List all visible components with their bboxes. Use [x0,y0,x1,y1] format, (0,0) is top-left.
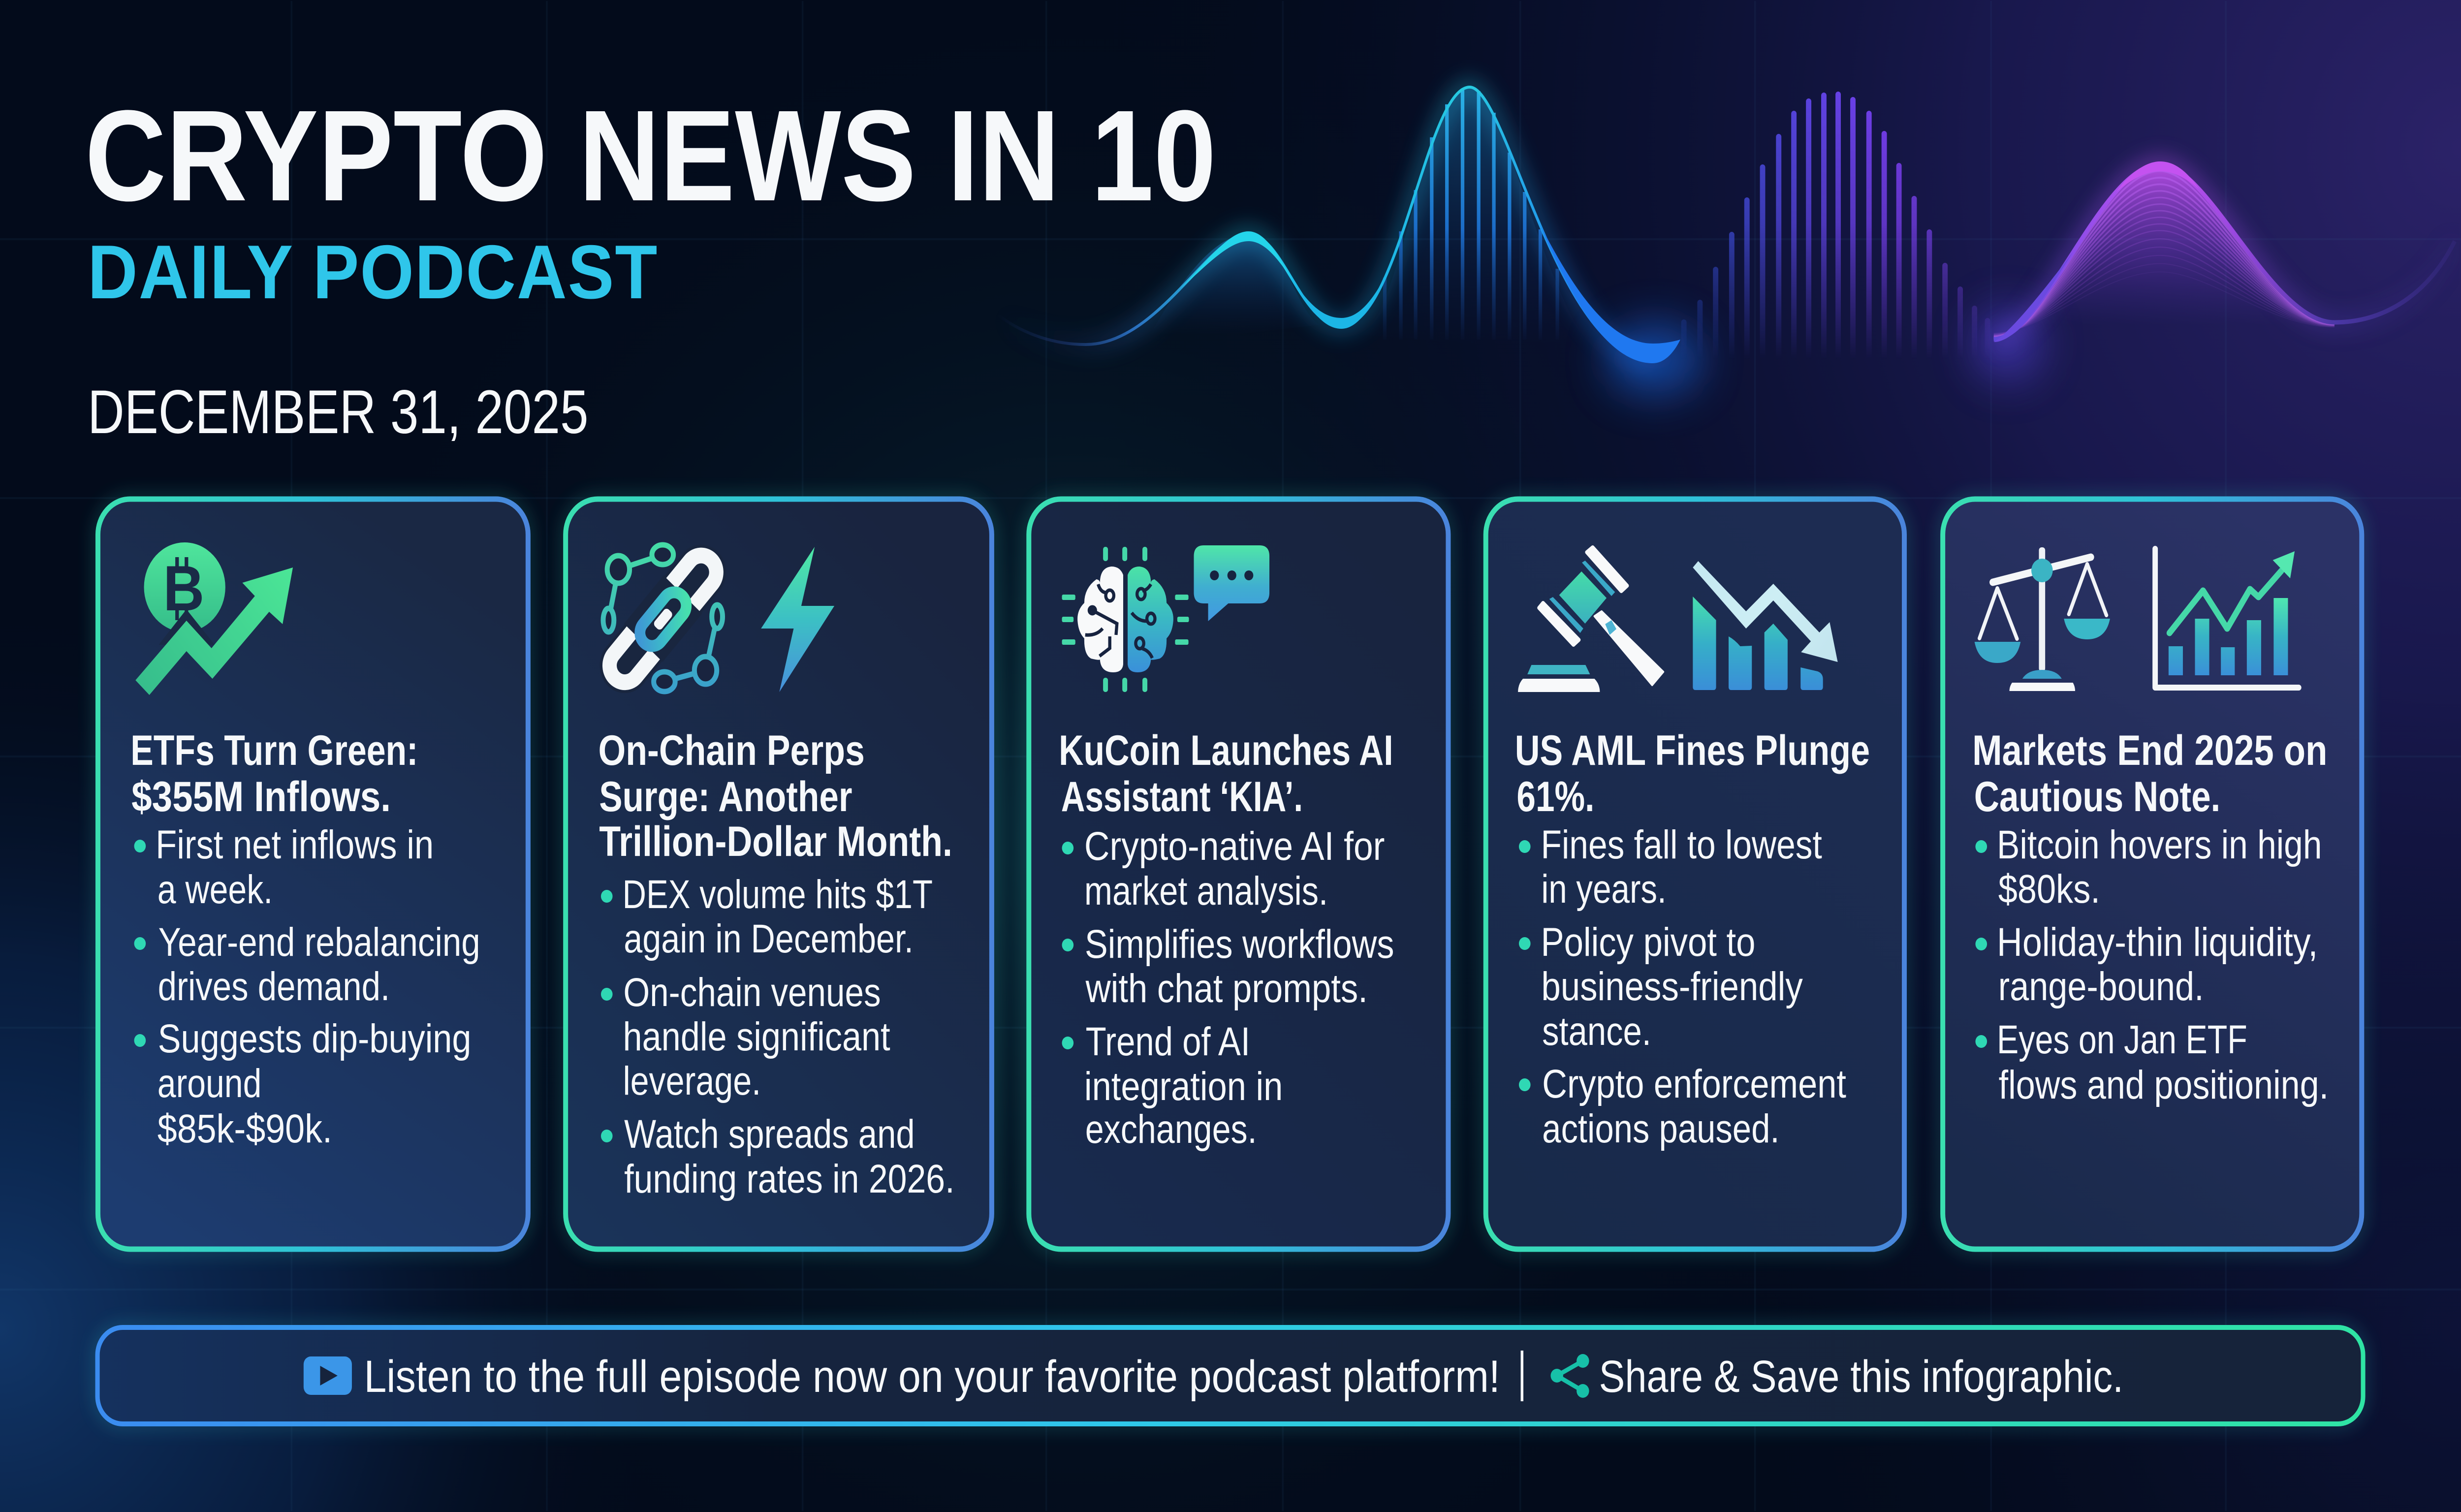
heading: markets [1972,727,2327,820]
panel: on-chain perps [566,499,992,1249]
bullets: on-chain perps [601,872,954,1201]
bullets: KuCoin AI: integration in [1084,1064,1283,1109]
panel: KuCoin AI [1029,499,1448,1249]
blue wave line [998,87,1653,360]
bullets: on-chain perps: Watch spreads and [624,1111,915,1157]
panel: US AML fines [1486,499,1904,1249]
bullets: KuCoin AI [1062,823,1394,1152]
bullets: markets: range-bound. [1998,964,2204,1009]
purple foot glow [1972,310,2044,379]
peak fill glow [1145,234,1319,345]
heading: KuCoin AI: Assistant ‘KIA’. [1061,774,1303,820]
main trough crescent [1540,223,1680,363]
subtitle: DAILY PODCAST [88,230,657,315]
bullets: US AML fines [1519,822,1846,1151]
bullets: US AML fines: Crypto enforcement [1542,1061,1846,1106]
heading: markets: Cautious Note. [1974,774,2220,820]
purple foot crescent [1994,252,2073,342]
bullets: US AML fines: business-friendly [1541,964,1803,1009]
heading: KuCoin AI: KuCoin Launches AI [1059,727,1393,774]
bullets: KuCoin AI: Trend of AI [1086,1019,1250,1064]
main trough glow [1605,325,1704,394]
bullets: US AML fines: in years. [1541,866,1667,912]
call to action bar [97,1327,2363,1424]
heading: US AML fines: US AML Fines Plunge [1515,727,1870,774]
bullets: KuCoin AI: Simplifies workflows [1085,921,1394,967]
blue wave glow [998,87,1653,360]
call to action text: Listen to the full episode now on your favorite podcast platform! [364,1351,1500,1402]
title: CRYPTO NEWS IN 10 [85,84,1216,228]
divider [1521,1351,1523,1401]
icon: lightning bolt [761,547,834,692]
heading: ETFs [130,727,418,820]
bullets: US AML fines: Policy pivot to [1541,919,1755,965]
bullets: markets: Holiday-thin liquidity, [1997,919,2318,965]
bullets: US AML fines: stance. [1542,1008,1651,1054]
bullets: on-chain perps: again in December. [624,916,914,961]
icon: rising bar chart [2155,549,2299,688]
panel: markets [1943,499,2362,1249]
bullets: ETFs [134,822,480,1151]
bullets: markets [1975,822,2329,1107]
heading: ETFs: $355M Inflows. [131,774,391,820]
bullets: ETFs: Suggests dip-buying [158,1016,471,1061]
bullets: KuCoin AI: Crypto-native AI for [1084,823,1385,869]
bullets: KuCoin AI: with chat prompts. [1085,966,1368,1011]
icon: AI brain [1062,547,1189,692]
heading: on-chain perps: Trillion-Dollar Month. [599,819,952,865]
central peak fill [1359,87,1609,354]
bullets: ETFs: drives demand. [158,964,390,1009]
icon: play button [304,1356,352,1395]
bullets: ETFs: around [158,1061,261,1106]
violet vertical bars [1681,92,1990,364]
icon: falling bars and arrow [1693,561,1838,690]
icon: gavel [1518,547,1663,692]
heading: markets: Markets End 2025 on [1972,727,2327,774]
heading: ETFs: ETFs Turn Green: [130,727,418,774]
icon: bitcoin with rising arrow [135,542,293,695]
heading: US AML fines [1515,727,1870,820]
icon: chat bubble [1194,545,1269,621]
bullets: markets: flows and positioning. [1999,1062,2329,1107]
heading: on-chain perps [598,727,952,865]
bullets: KuCoin AI: market analysis. [1084,868,1328,914]
first trough crescent [1293,274,1387,329]
bullets: on-chain perps: leverage. [623,1058,761,1103]
purple peak crescent [2116,161,2199,192]
bullets: ETFs: First net inflows in [156,822,434,867]
bullets: on-chain perps: funding rates in 2026. [624,1156,954,1201]
bullets: KuCoin AI: exchanges. [1085,1106,1257,1152]
bullets: markets: Bitcoin hovers in high [1997,822,2322,867]
bullets: US AML fines: actions paused. [1542,1106,1780,1151]
purple wave glow [1994,164,2455,339]
bullets: markets: $80ks. [1998,866,2100,912]
heading: on-chain perps: Surge: Another [599,774,852,820]
bullets: markets: Eyes on Jan ETF [1997,1017,2247,1062]
date: DECEMBER 31, 2025 [88,378,588,446]
bullets: US AML fines: Fines fall to lowest [1541,822,1822,867]
icon: share [1550,1354,1589,1398]
icon: chain link with nodes [603,545,723,692]
bullets: on-chain perps: handle significant [623,1014,890,1059]
purple wave line [1994,164,2455,339]
panel: ETFs [98,499,528,1249]
blue vertical bars [1385,89,1557,340]
bullets: ETFs: $85k-$90k. [158,1106,332,1151]
first peak crescent [1179,231,1293,289]
heading: on-chain perps: On-Chain Perps [598,727,865,774]
bullets: ETFs: a week. [158,867,273,912]
heading: KuCoin AI [1059,727,1393,820]
purple nested arcs [1994,171,2335,339]
share text: Share & Save this infographic. [1599,1351,2123,1402]
bullets: on-chain perps: On-chain venues [623,970,881,1015]
heading: US AML fines: 61%. [1516,774,1594,820]
purple peak fill [1994,164,2335,339]
icon: bitcoin with rising arrow: B [163,553,204,624]
bullets: on-chain perps: DEX volume hits $1T [623,872,933,917]
icon: scales [1975,547,2110,691]
bullets: ETFs: Year-end rebalancing [158,919,480,965]
audio waveform [998,87,2455,394]
